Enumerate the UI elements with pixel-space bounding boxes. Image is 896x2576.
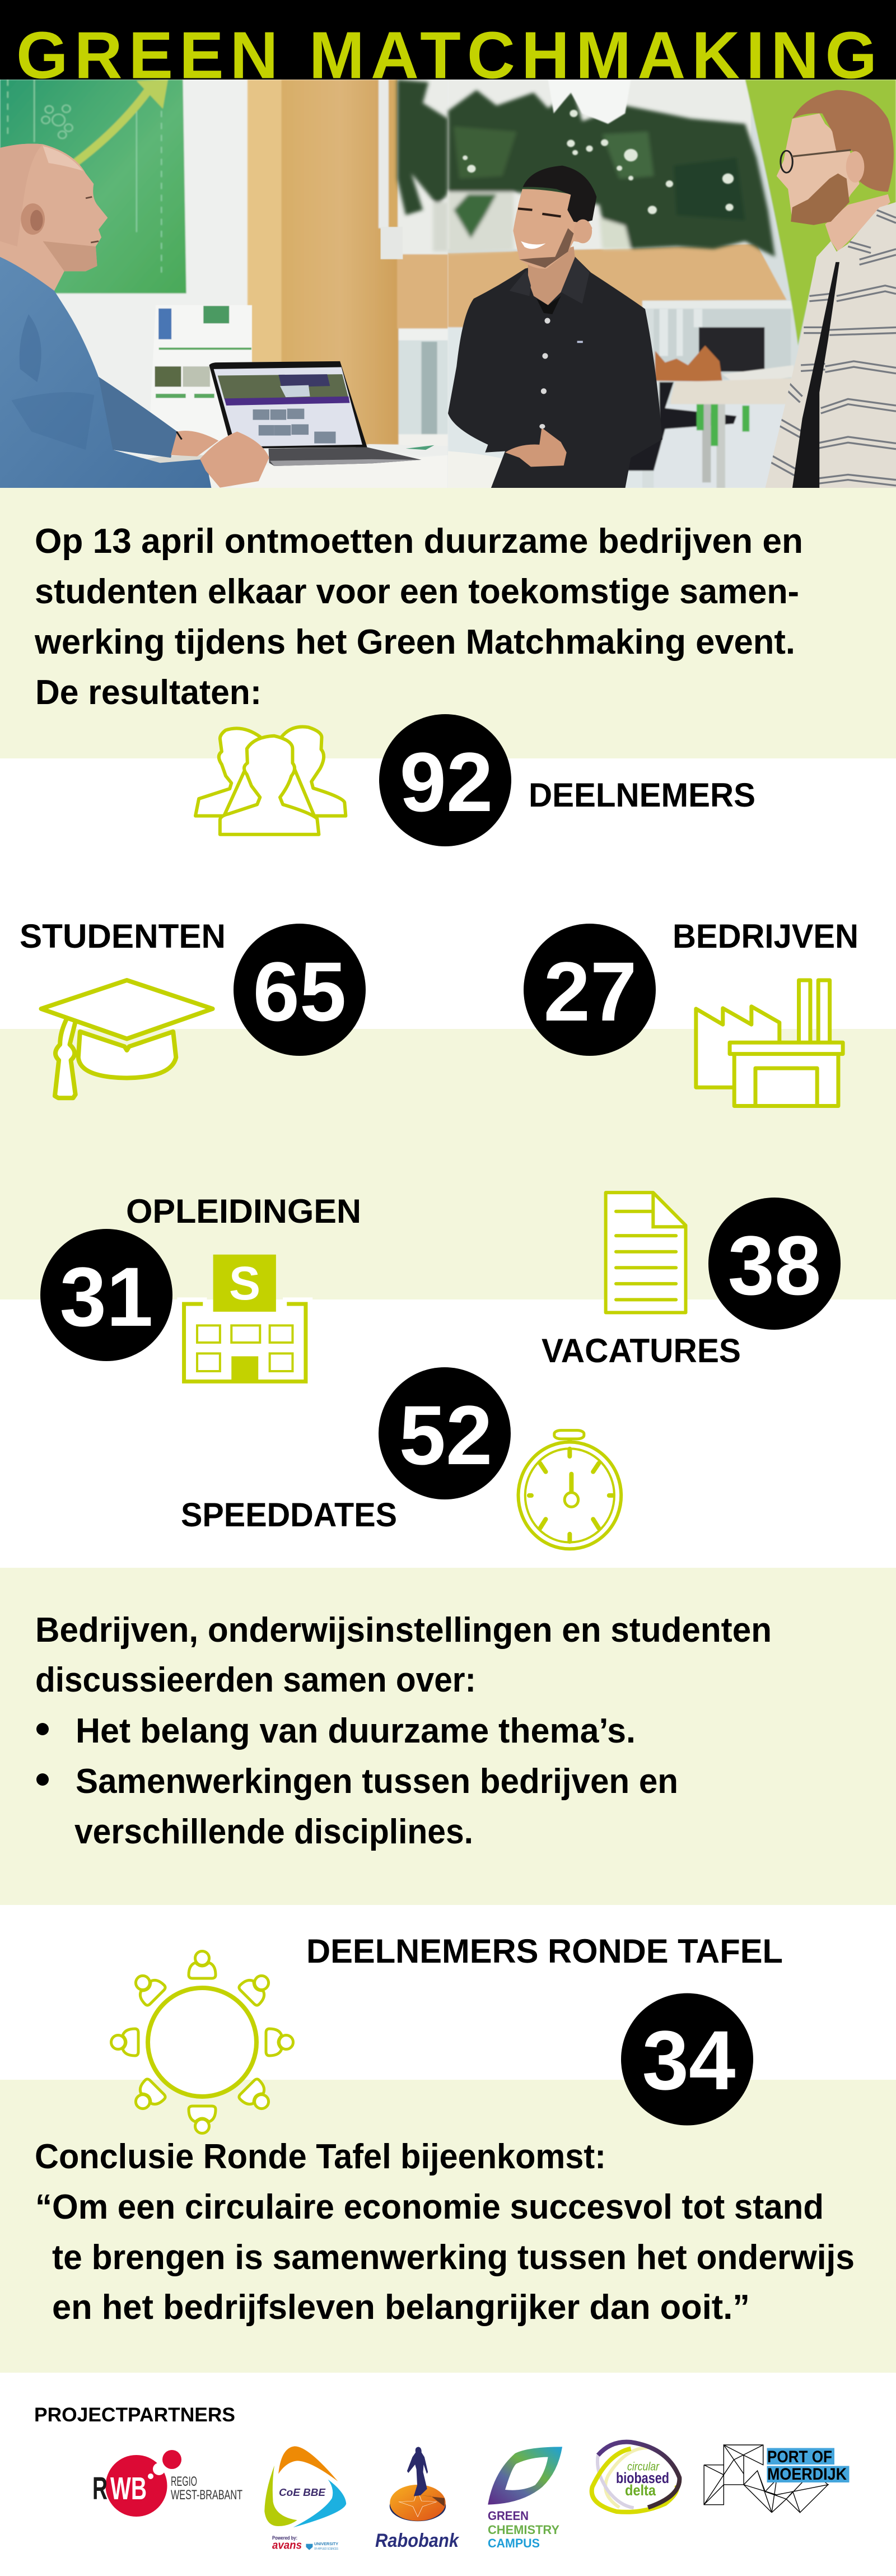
logo: circular biobased delta — [592, 2442, 679, 2512]
stat: 27 bedrijven: BEDRIJVEN — [673, 917, 858, 955]
title banner: GREEN MATCHMAKING — [16, 18, 877, 93]
discussion paragraph — [35, 1611, 772, 1851]
icon: graduation cap — [41, 980, 213, 1098]
stat: 52 speeddates — [181, 1367, 511, 1534]
logo: Port of Moerdijk — [704, 2445, 849, 2513]
intro paragraph: Op 13 april ontmoetten duurzame bedrijven en — [35, 522, 803, 561]
logo: Green Chemistry Campus: CAMPUS — [488, 2536, 540, 2550]
plant — [448, 90, 775, 257]
logo: circular biobased delta: delta — [625, 2482, 656, 2499]
middle man — [448, 166, 662, 488]
intro paragraph — [34, 522, 803, 712]
stat: 31 opleidingen: 31 — [60, 1250, 153, 1344]
logo: CoE BBE: Powered by: — [272, 2535, 297, 2541]
stat: 38 vacatures: 38 — [728, 1218, 821, 1312]
stat: 92 deelnemers: DEELNEMERS — [529, 776, 755, 814]
logo: Green Chemistry Campus: CHEMISTRY — [488, 2523, 559, 2537]
right man — [765, 90, 896, 488]
logo: RWB Regio West-Brabant — [92, 2450, 242, 2517]
logo: Green Chemistry Campus — [488, 2447, 562, 2550]
intro paragraph: De resultaten: — [35, 673, 262, 712]
logo: Green Chemistry Campus: GREEN — [488, 2509, 529, 2523]
icon: round table with eight people — [111, 1951, 293, 2133]
logo: CoE BBE: UNIVERSITY — [314, 2542, 338, 2546]
stat: 31 opleidingen: OPLEIDINGEN — [126, 1192, 361, 1230]
discussion paragraph: Bedrijven, onderwijsinstellingen en studenten — [35, 1611, 772, 1650]
logo: CoE BBE: OF APPLIED SCIENCES — [314, 2547, 338, 2551]
stat: 65 studenten: 65 — [253, 944, 346, 1038]
conclusion quote: en het bedrijfsleven belangrijker dan ooit.” — [52, 2288, 750, 2327]
stat: 34: 34 — [642, 2013, 735, 2107]
logo: circular biobased delta: biobased — [616, 2470, 669, 2486]
icon: factory — [696, 980, 843, 1106]
table — [448, 451, 502, 488]
logo: Rabobank — [375, 2447, 460, 2551]
icon: document — [606, 1192, 685, 1312]
stat: 27 bedrijven: 27 — [544, 944, 637, 1038]
stat: 38 vacatures — [542, 1198, 841, 1369]
intro paragraph: werking tijdens het Green Matchmaking event. — [34, 623, 795, 662]
stat: 31 opleidingen — [40, 1192, 361, 1361]
stat: 92 deelnemers: 92 — [400, 735, 493, 829]
stat: 27 bedrijven — [524, 917, 858, 1056]
laptop — [209, 361, 448, 466]
discussion paragraph: Samenwerkingen tussen bedrijven en — [76, 1762, 678, 1801]
conclusion quote: Conclusie Ronde Tafel bijeenkomst: — [35, 2137, 606, 2176]
conclusion quote: “Om een circulaire economie succesvol tot stand — [35, 2188, 824, 2226]
logo: RWB Regio West-Brabant: WB — [110, 2471, 147, 2507]
heading: projectpartners: PROJECTPARTNERS — [34, 2404, 235, 2426]
stat: 38 vacatures: VACATURES — [542, 1332, 741, 1369]
stat: 92 deelnemers — [379, 714, 755, 846]
stat: 52 speeddates: 52 — [399, 1388, 492, 1482]
icon: stopwatch — [519, 1431, 621, 1549]
logo: RWB Regio West-Brabant: WEST-BRABANT — [171, 2488, 242, 2503]
logo: circular biobased delta: circular — [627, 2460, 660, 2473]
intro paragraph: studenten elkaar voor een toekomstige samen- — [35, 572, 799, 611]
stat: 52 speeddates: SPEEDDATES — [181, 1496, 397, 1534]
table — [147, 455, 204, 463]
logo: CoE BBE: CoE BBE — [279, 2487, 326, 2498]
logo: Rabobank: Rabobank — [375, 2530, 460, 2551]
logo: Port of Moerdijk: MOERDIJK — [767, 2465, 847, 2484]
discussion paragraph: discussieerden samen over: — [35, 1661, 476, 1699]
heading: deelnemers ronde tafel: DEELNEMERS RONDE TAFEL — [306, 1932, 783, 1970]
plant highlights — [463, 80, 734, 214]
icon: participants — [195, 727, 346, 835]
school building letter S: S — [229, 1257, 260, 1310]
logo: RWB Regio West-Brabant: REGIO — [171, 2474, 197, 2489]
stat: 65 studenten: STUDENTEN — [20, 917, 226, 955]
conclusion quote: te brengen is samenwerking tussen het onderwijs — [52, 2238, 855, 2277]
plant edge, left view — [397, 80, 448, 251]
stat: 65 studenten — [20, 917, 366, 1056]
discussion paragraph: Het belang van duurzame thema’s. — [76, 1712, 636, 1750]
stat: 34 — [621, 1993, 753, 2125]
discussion paragraph: verschillende disciplines. — [74, 1813, 473, 1851]
logo: Port of Moerdijk: PORT OF — [767, 2448, 832, 2466]
photo: three people talking around a laptop — [0, 80, 896, 488]
left man — [0, 143, 269, 488]
logo: CoE BBE — [264, 2446, 346, 2552]
logo: RWB Regio West-Brabant: R — [92, 2471, 108, 2507]
conclusion quote — [35, 2137, 855, 2327]
logo: CoE BBE: avans — [272, 2540, 302, 2552]
poster — [155, 305, 253, 398]
icon: school building — [177, 1255, 312, 1381]
